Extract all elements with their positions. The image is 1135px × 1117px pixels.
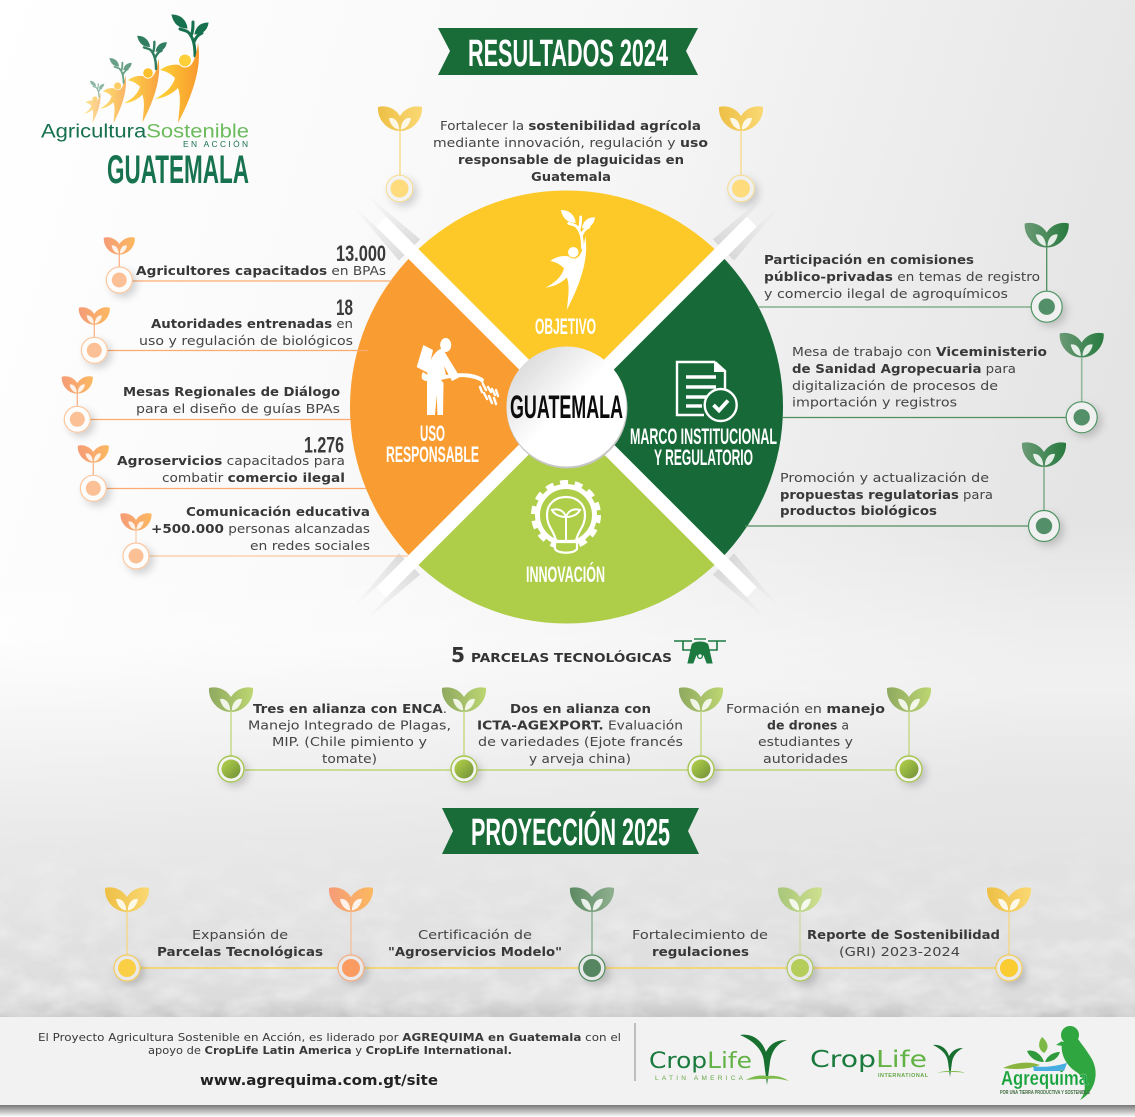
item: comunicación educativa <box>120 505 408 569</box>
footer description: apoyo de CropLife Latin America y CropLife International. <box>148 1044 512 1057</box>
item: propuestas regulatorias: Promoción y actualización de <box>780 471 989 486</box>
logo: CropLife Latin America: LATIN AMERICA <box>655 1075 744 1082</box>
banner: Resultados 2024 <box>438 28 698 75</box>
label: marco institucional y regulatorio <box>630 424 777 470</box>
text: expansión parcelas <box>157 928 323 960</box>
logo: CropLife International: INTERNATIONAL <box>878 1073 929 1079</box>
white diagonal bands <box>347 188 786 626</box>
item: agroservicios: combatir comercio ilegal <box>162 471 345 486</box>
item: agricultores capacitados <box>104 237 392 293</box>
logo figures <box>83 15 208 123</box>
item: comisiones público-privadas: público-privadas en temas de registro <box>764 270 1040 285</box>
text: alianza ENCA: tomate) <box>322 752 377 767</box>
text: alianza ICTA-AGEXPORT: y arveja china) <box>529 752 631 767</box>
icon: person with plant <box>546 210 594 310</box>
item: autoridades entrenadas: 18 <box>336 295 353 320</box>
label: uso responsable <box>386 421 479 467</box>
item: autoridades entrenadas <box>79 295 368 363</box>
item: propuestas regulatorias <box>745 442 1066 542</box>
list: uso responsable results <box>62 237 408 569</box>
label: marco institucional y regulatorio: MARCO INSTITUCIONAL <box>630 424 777 449</box>
item: mesas regionales: para el diseño de guías BPAs <box>136 402 340 417</box>
node 1 <box>209 687 253 782</box>
objective text: Guatemala <box>531 170 611 185</box>
text: reporte sostenibilidad: (GRI) 2023-2024 <box>839 945 960 960</box>
heading: 5 parcelas tecnológicas: PARCELAS TECNOLÓGICAS <box>471 650 672 665</box>
text: alianza ENCA: Manejo Integrado de Plagas, <box>248 718 451 734</box>
text: formación drones: de drones a <box>767 718 849 734</box>
node 4 <box>887 687 931 782</box>
heading: 5 parcelas tecnológicas: 5 <box>451 643 465 667</box>
diagram: four-part circle <box>347 188 786 626</box>
logo: Agricultura Sostenible en Acción Guatemala <box>41 15 249 192</box>
item: propuestas regulatorias: productos biológicos <box>780 504 937 519</box>
logo: CropLife Latin America <box>649 1035 789 1085</box>
text: alianza ENCA: Tres en alianza con ENCA . <box>253 702 447 717</box>
item: agricultores capacitados: 13.000 <box>336 241 386 266</box>
text: formación drones: Formación en manejo <box>726 702 885 717</box>
footer description: El Proyecto Agricultura Sostenible en Acción, es liderado por AGREQUIMA en Guatemala con el <box>38 1031 621 1044</box>
item: comisiones público-privadas <box>758 223 1069 322</box>
item: mesa de trabajo: digitalización de procesos de <box>792 379 998 394</box>
icon: drone <box>674 639 726 663</box>
logo: Agrequima: Agrequima <box>1001 1068 1089 1090</box>
text: alianza ICTA-AGEXPORT: ICTA-AGEXPORT. Evaluación <box>477 718 683 734</box>
text: formación drones: estudiantes y <box>758 735 853 750</box>
banner: Proyección 2025 <box>442 808 699 854</box>
text: fortalecimiento regulaciones: Fortalecimiento de <box>632 928 768 943</box>
item: agricultores capacitados: Agricultores capacitados en BPAs <box>136 264 386 279</box>
objective text: mediante innovación, regulación y uso <box>433 136 706 151</box>
logo tagline: EN ACCIÓN <box>183 139 248 149</box>
item: propuestas regulatorias: propuestas regulatorias para <box>780 488 993 503</box>
label: objetivo: OBJETIVO <box>535 314 596 339</box>
text: expansión parcelas: Expansión de <box>192 928 288 943</box>
logo: Agrequima: POR UNA TIERRA PRODUCTIVA Y SOSTENIBLE <box>1000 1090 1090 1096</box>
logo country name: GUATEMALA <box>107 148 249 192</box>
text: alianza ICTA-AGEXPORT <box>477 702 683 767</box>
item: agroservicios: 1.276 <box>304 433 344 458</box>
item: autoridades entrenadas: Autoridades entrenadas en <box>151 317 353 332</box>
item: mesa de trabajo: de Sanidad Agropecuaria para <box>792 362 1016 377</box>
item: comunicación educativa: en redes sociales <box>250 539 370 554</box>
text: fortalecimiento regulaciones <box>632 928 768 960</box>
sprout marker: objective left <box>378 106 422 202</box>
heading: 5 parcelas tecnológicas <box>451 639 726 667</box>
item: agroservicios: Agroservicios capacitados para <box>117 454 345 469</box>
logo: CropLife International: Crop Life <box>810 1047 927 1073</box>
item: autoridades entrenadas: uso y regulación de biológicos <box>139 334 353 349</box>
logo: CropLife Latin America: Crop Life <box>649 1049 752 1074</box>
objective text: responsable de plaguicidas en <box>458 153 684 168</box>
text: reporte sostenibilidad <box>807 928 1000 960</box>
item: mesa de trabajo: importación y registros <box>792 396 957 410</box>
item: agroservicios <box>78 433 366 501</box>
timeline: parcelas tecnológicas <box>209 687 931 782</box>
text: alianza ICTA-AGEXPORT: Dos en alianza con <box>510 702 651 717</box>
center disc <box>506 346 628 468</box>
text: agroservicios modelo <box>388 928 562 960</box>
item: mesa de trabajo <box>783 333 1104 433</box>
timeline: proyección 2025 <box>105 887 1031 981</box>
footer panel <box>0 1017 1135 1117</box>
footer website: www.agrequima.com.gt/site <box>200 1073 438 1089</box>
icon: gear with light bulb <box>534 482 598 553</box>
label: uso responsable: USO <box>420 421 445 446</box>
item: mesas regionales: Mesas Regionales de Diálogo <box>123 385 340 400</box>
node: certificación <box>329 887 373 981</box>
objective text: Fortalecer la sostenibilidad agrícola <box>440 119 692 134</box>
text: alianza ENCA <box>248 702 451 767</box>
center disc: GUATEMALA <box>510 389 623 425</box>
text: alianza ENCA: MIP. (Chile pimiento y <box>272 735 427 750</box>
node: regulaciones <box>570 887 614 981</box>
item: comisiones público-privadas: y comercio ilegal de agroquímicos <box>764 287 1008 302</box>
list: marco institucional results <box>745 223 1104 542</box>
icon: person spraying <box>417 338 498 415</box>
node 3 <box>679 687 723 782</box>
text: agroservicios modelo: "Agroservicios Modelo" <box>388 945 562 960</box>
segment: uso responsable <box>350 254 566 560</box>
segment: objetivo <box>413 190 720 407</box>
label: uso responsable: RESPONSABLE <box>386 442 479 467</box>
text: reporte sostenibilidad: Reporte de Sostenibilidad <box>807 928 1000 943</box>
segment: innovación <box>413 407 720 624</box>
sprout marker: objective right <box>719 106 763 202</box>
logo: CropLife International <box>810 1045 965 1079</box>
text: agroservicios modelo: Certificación de <box>418 928 532 943</box>
item: mesa de trabajo: Mesa de trabajo con Viceministerio <box>792 345 1047 360</box>
text: fortalecimiento regulaciones: regulaciones <box>652 945 749 960</box>
logo: Agrequima <box>1000 1026 1096 1100</box>
text: formación drones: autoridades <box>763 752 848 767</box>
icon: document with check <box>677 362 737 421</box>
item: comisiones público-privadas: Participación en comisiones <box>764 253 974 268</box>
banner: Resultados 2024: RESULTADOS 2024 <box>468 33 668 75</box>
node 2 <box>442 687 486 782</box>
banner: Proyección 2025: PROYECCIÓN 2025 <box>471 810 670 854</box>
text: expansión parcelas: Parcelas Tecnológicas <box>157 945 323 960</box>
segment: marco institucional <box>566 254 783 560</box>
label: marco institucional y regulatorio: Y REGULATORIO <box>654 445 753 470</box>
item: mesas regionales <box>62 376 351 432</box>
label: innovación: INNOVACIÓN <box>526 562 605 587</box>
text: formación drones <box>726 702 885 767</box>
logo wordmark: Agricultura Sostenible <box>41 122 249 142</box>
item: comunicación educativa: Comunicación educativa <box>186 505 370 520</box>
node: reporte derecha <box>987 887 1031 981</box>
item: comunicación educativa: +500.000 personas alcanzadas <box>151 522 370 537</box>
node: expansión <box>105 887 149 981</box>
footer description <box>38 1031 621 1057</box>
node: reporte izquierda <box>778 887 822 981</box>
text: alianza ICTA-AGEXPORT: de variedades (Ejote francés <box>478 735 683 750</box>
